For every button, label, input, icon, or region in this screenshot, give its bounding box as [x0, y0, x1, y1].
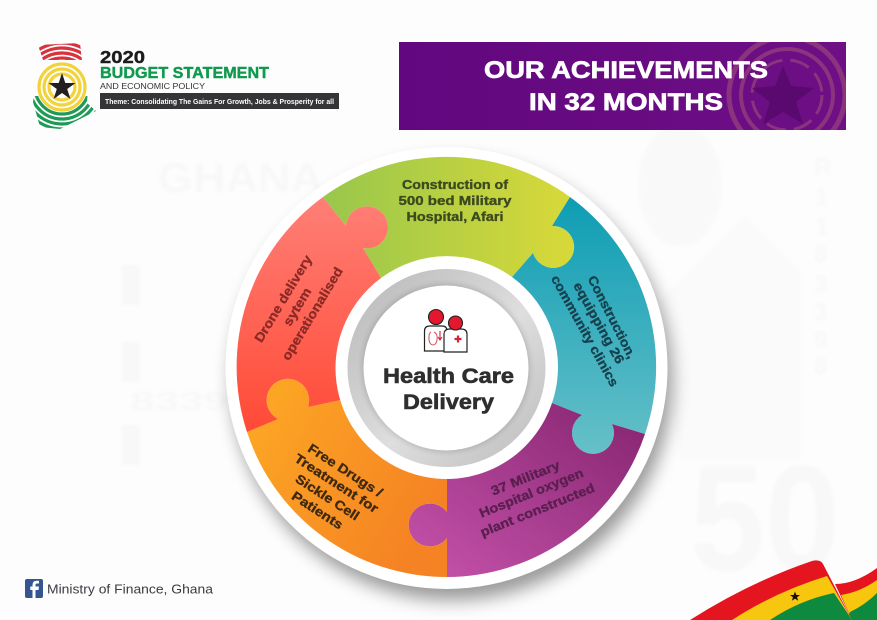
banknote watermark background: 8339 [130, 386, 228, 416]
puzzle piece: green: Hospital, Afari [406, 209, 504, 224]
banknote watermark background: 3 [814, 271, 827, 298]
icon: banner emblem rings and star [726, 42, 846, 130]
puzzle wheel [226, 147, 672, 600]
centre hub [336, 257, 558, 479]
puzzle piece: teal: Construction, [585, 273, 639, 361]
puzzle piece: orange: Sickle Cell [293, 471, 362, 523]
Ghana flag ribbon [690, 560, 877, 620]
hub heading: Delivery [403, 391, 494, 414]
banknote watermark background: 1 [815, 184, 828, 211]
puzzle piece: purple: Hospital oxygen [477, 465, 586, 521]
banknote watermark background: 8 [814, 353, 827, 380]
puzzle piece: purple: 37 Military [489, 457, 563, 498]
banner heading: OUR ACHIEVEMENTS [484, 57, 768, 84]
logo: 2020 Budget Statement [18, 43, 339, 131]
puzzle piece: purple [409, 403, 645, 577]
hub heading: Health Care [383, 365, 514, 388]
puzzle piece: teal: community clinics [548, 273, 622, 389]
puzzle piece: teal [512, 197, 656, 454]
puzzle piece: orange: Patients [289, 488, 346, 532]
banknote watermark background: 50 [690, 434, 840, 602]
footer: Facebook credit [25, 579, 214, 598]
icon: Ghana map with concentric rings and star [33, 43, 96, 129]
banknote watermark background: 8 [814, 241, 827, 268]
puzzle piece: teal: equipping 26 [570, 279, 628, 366]
puzzle piece: red [237, 197, 388, 432]
hub heading [383, 365, 514, 414]
puzzle piece: orange [247, 379, 447, 577]
logo year: 2020 [100, 47, 145, 67]
wheel shadow [232, 160, 672, 600]
wheel white rim [226, 147, 668, 589]
title banner [399, 42, 846, 130]
footer text: Ministry of Finance, Ghana [47, 582, 214, 596]
puzzle piece: red: sytem [280, 285, 314, 329]
puzzle piece: purple: plant constructed [478, 480, 597, 540]
banknote watermark background: R [814, 154, 831, 181]
icon: two doctors [424, 310, 467, 352]
icon: Facebook [25, 579, 43, 598]
puzzle piece: orange: Treatment for [292, 451, 381, 516]
icon: flag star [790, 592, 800, 601]
puzzle piece: red: operationalised [278, 264, 346, 363]
banknote watermark background [122, 123, 840, 602]
banknote watermark background: 3 [814, 299, 827, 326]
logo theme bar: Theme: Consolidating The Gains For Growth, Jobs & Prosperity for all [105, 99, 334, 106]
flag back section [835, 568, 877, 620]
banknote watermark background: 1 [815, 214, 828, 241]
puzzle piece: red: Drone delivery [251, 252, 315, 345]
puzzle piece: orange: Free Drugs / [305, 441, 386, 500]
banner heading [484, 57, 768, 116]
logo title: BUDGET STATEMENT [100, 65, 269, 82]
puzzle piece: green: Construction of [402, 177, 509, 192]
logo subtitle: AND ECONOMIC POLICY [100, 81, 205, 91]
banknote watermark background: GHANA [158, 154, 323, 201]
flag front section [690, 560, 852, 620]
banner heading: IN 32 MONTHS [529, 89, 723, 116]
icon: black star [48, 73, 76, 99]
logo theme bar [100, 93, 339, 109]
puzzle piece: green [323, 157, 574, 278]
puzzle piece: green: 500 bed Military [398, 193, 512, 208]
banknote watermark background: 9 [814, 327, 827, 354]
